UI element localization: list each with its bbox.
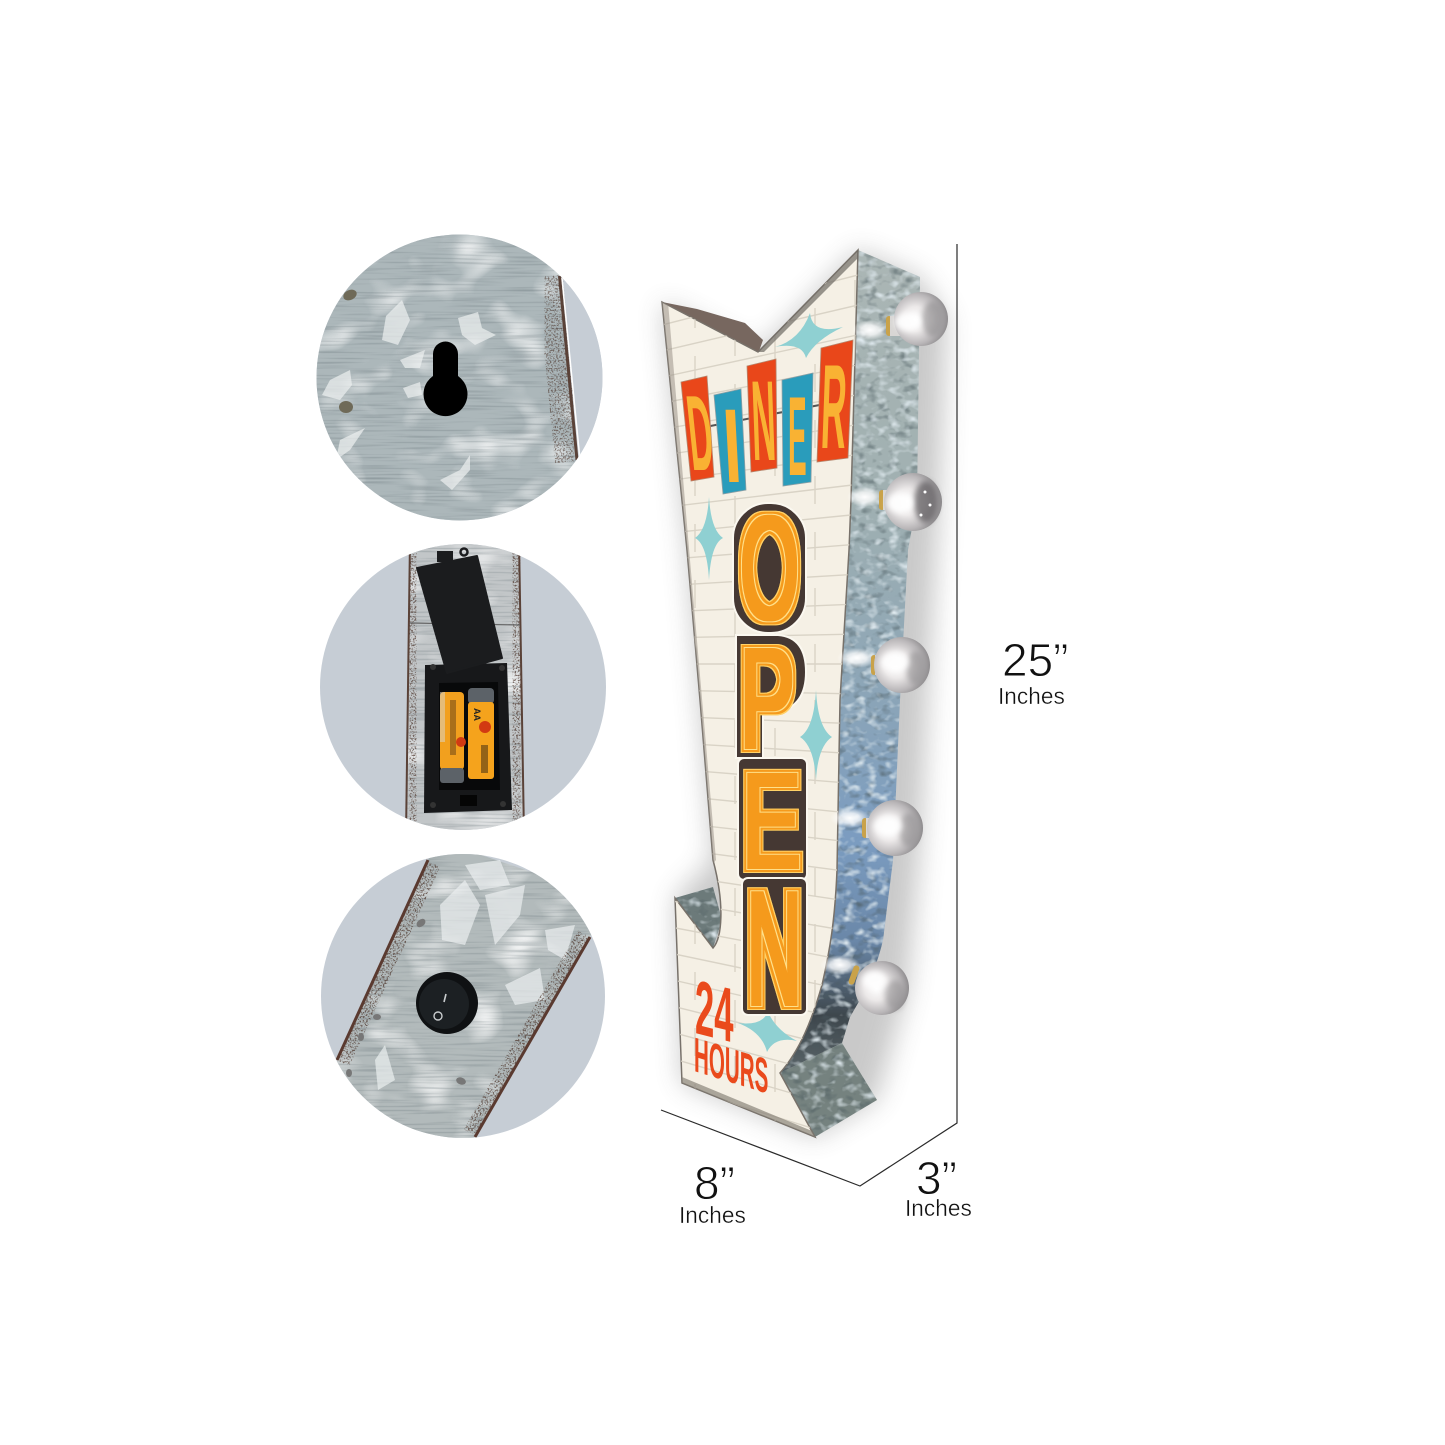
- depth label: 3 inches: [905, 1152, 972, 1221]
- star: top: [775, 313, 843, 358]
- depth label: 3 inches: Inches: [905, 1195, 972, 1221]
- OPEN letter backing: [733, 503, 807, 1015]
- sign drop shadow: [662, 250, 947, 1137]
- battery left: [440, 692, 466, 783]
- dimension lines: [661, 244, 957, 1186]
- sign: front face: [660, 250, 860, 1143]
- sign: lower right flap: [780, 1043, 877, 1137]
- sign: metal side panel: [780, 250, 920, 1073]
- heading: DINER letters: N: [749, 357, 778, 484]
- icon: rivet top: [342, 288, 358, 302]
- battery right: AA: [472, 708, 482, 721]
- heading: DINER letters: [682, 339, 849, 505]
- icon: rocker switch: [416, 972, 478, 1034]
- text: HOURS: HOURS: [694, 1028, 768, 1105]
- battery right: [468, 688, 494, 779]
- heading: DINER letters: E: [788, 375, 807, 500]
- sign: upper left flap: [662, 302, 763, 354]
- bulb 5: [848, 961, 909, 1015]
- width label: 8 inches: 8”: [694, 1157, 735, 1209]
- detail circle: keyhole mount: [316, 234, 602, 520]
- text: 24: 24: [695, 964, 734, 1059]
- heading: DINER letters: I: [720, 387, 744, 505]
- heading: OPEN neon letters: O: [740, 489, 799, 649]
- icon: rivet bottom: [339, 401, 353, 413]
- heading: DINER letters: R: [819, 339, 849, 474]
- height label: 25 inches: [998, 634, 1068, 709]
- width label: 8 inches: Inches: [679, 1202, 746, 1228]
- star: right: [800, 690, 832, 780]
- battery cover: [417, 548, 502, 673]
- bulb 4: [862, 800, 923, 856]
- height label: 25 inches: Inches: [998, 683, 1065, 709]
- heading: OPEN neon letters: [740, 489, 802, 1039]
- heading: OPEN neon letters: E: [742, 747, 801, 897]
- star: left: [695, 497, 723, 580]
- heading: OPEN neon letters: N: [747, 858, 802, 1039]
- depth label: 3 inches: 3”: [916, 1152, 957, 1204]
- star: bottom: [738, 1012, 797, 1052]
- heading: OPEN neon letters: P: [740, 621, 795, 778]
- battery case: [424, 663, 512, 813]
- heading: DINER letters: D: [682, 373, 718, 493]
- bulb 3: [871, 637, 930, 693]
- bulb 1: [886, 292, 948, 346]
- height label: 25 inches: 25”: [1002, 634, 1068, 686]
- detail circle: battery compartment: [320, 540, 606, 835]
- bulb glow highlights on metal: [820, 320, 888, 975]
- bulb 2: [879, 473, 942, 531]
- sign: lower left flap: [675, 887, 722, 948]
- DINER sign tiles: [681, 339, 853, 505]
- icon: keyhole: [424, 342, 468, 416]
- detail circle: on/off switch: [321, 854, 605, 1138]
- width label: 8 inches: [679, 1157, 746, 1228]
